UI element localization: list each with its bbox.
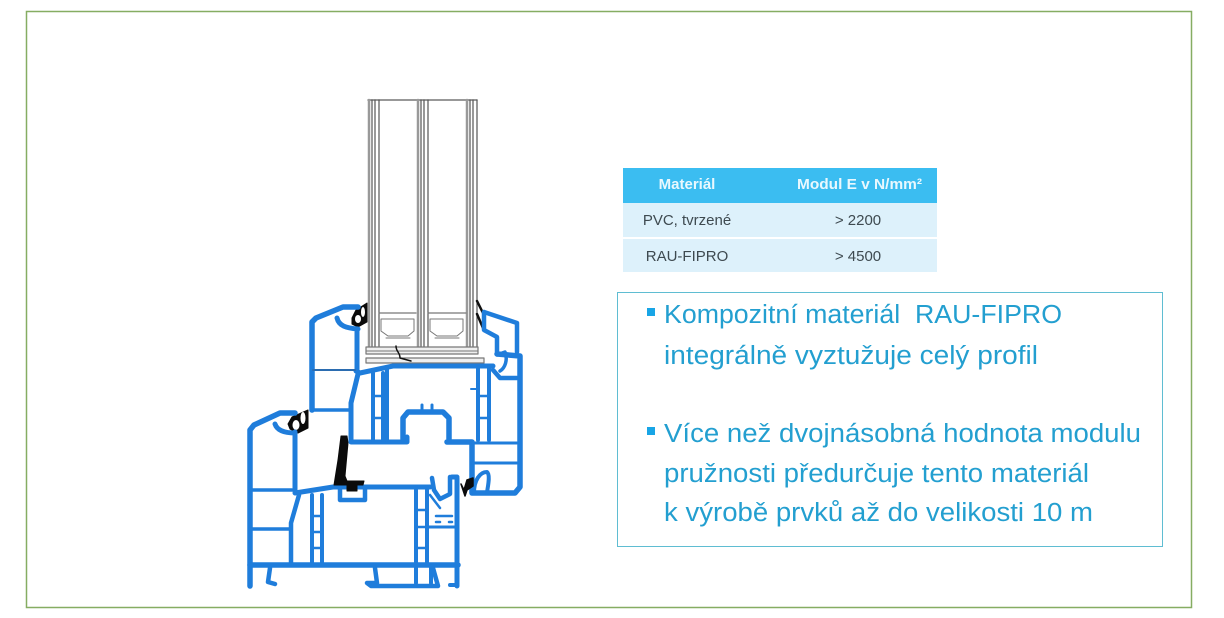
lower right gasket (461, 478, 473, 496)
bullet 1 (647, 308, 655, 316)
black sealing block (334, 436, 364, 491)
upper left gasket (352, 303, 367, 327)
bullet 2 (647, 427, 655, 435)
bullet text 1 (664, 301, 1062, 370)
window profile cross-section (250, 100, 520, 586)
bullet text 2 (664, 420, 1141, 527)
table header: Materiál (659, 176, 715, 193)
small black glazing seal (396, 346, 411, 361)
bullet text 1: Kompozitní materiál RAU-FIPRO (664, 301, 1062, 329)
table row: PVC: PVC, tvrzené (643, 212, 731, 229)
bullet text 1: integrálně vyztužuje celý profil (664, 342, 1038, 370)
right upper gasket (477, 301, 483, 328)
table header (623, 168, 937, 203)
table row: RAU-FIPRO: RAU-FIPRO (646, 248, 728, 265)
table: material modulus (623, 168, 937, 272)
callout box (618, 292, 1162, 546)
lower left gasket (288, 410, 308, 433)
table row: PVC (623, 203, 937, 237)
glazing unit (366, 100, 484, 363)
blue profile walls (250, 307, 520, 586)
table row: PVC: > 2200 (835, 212, 881, 229)
bullet text 2: k výrobě prvků až do velikosti 10 m (664, 499, 1093, 527)
table row: RAU-FIPRO: > 4500 (835, 248, 881, 265)
table header: Modul E v N/mm² (797, 176, 922, 193)
bullet text 2: Více než dvojnásobná hodnota modulu (664, 420, 1141, 448)
lower frame (250, 413, 295, 586)
bullet text 2: pružnosti předurčuje tento materiál (664, 460, 1089, 488)
upper mullions (373, 367, 489, 440)
upper sash (312, 307, 358, 410)
table row: RAU-FIPRO (623, 239, 937, 272)
